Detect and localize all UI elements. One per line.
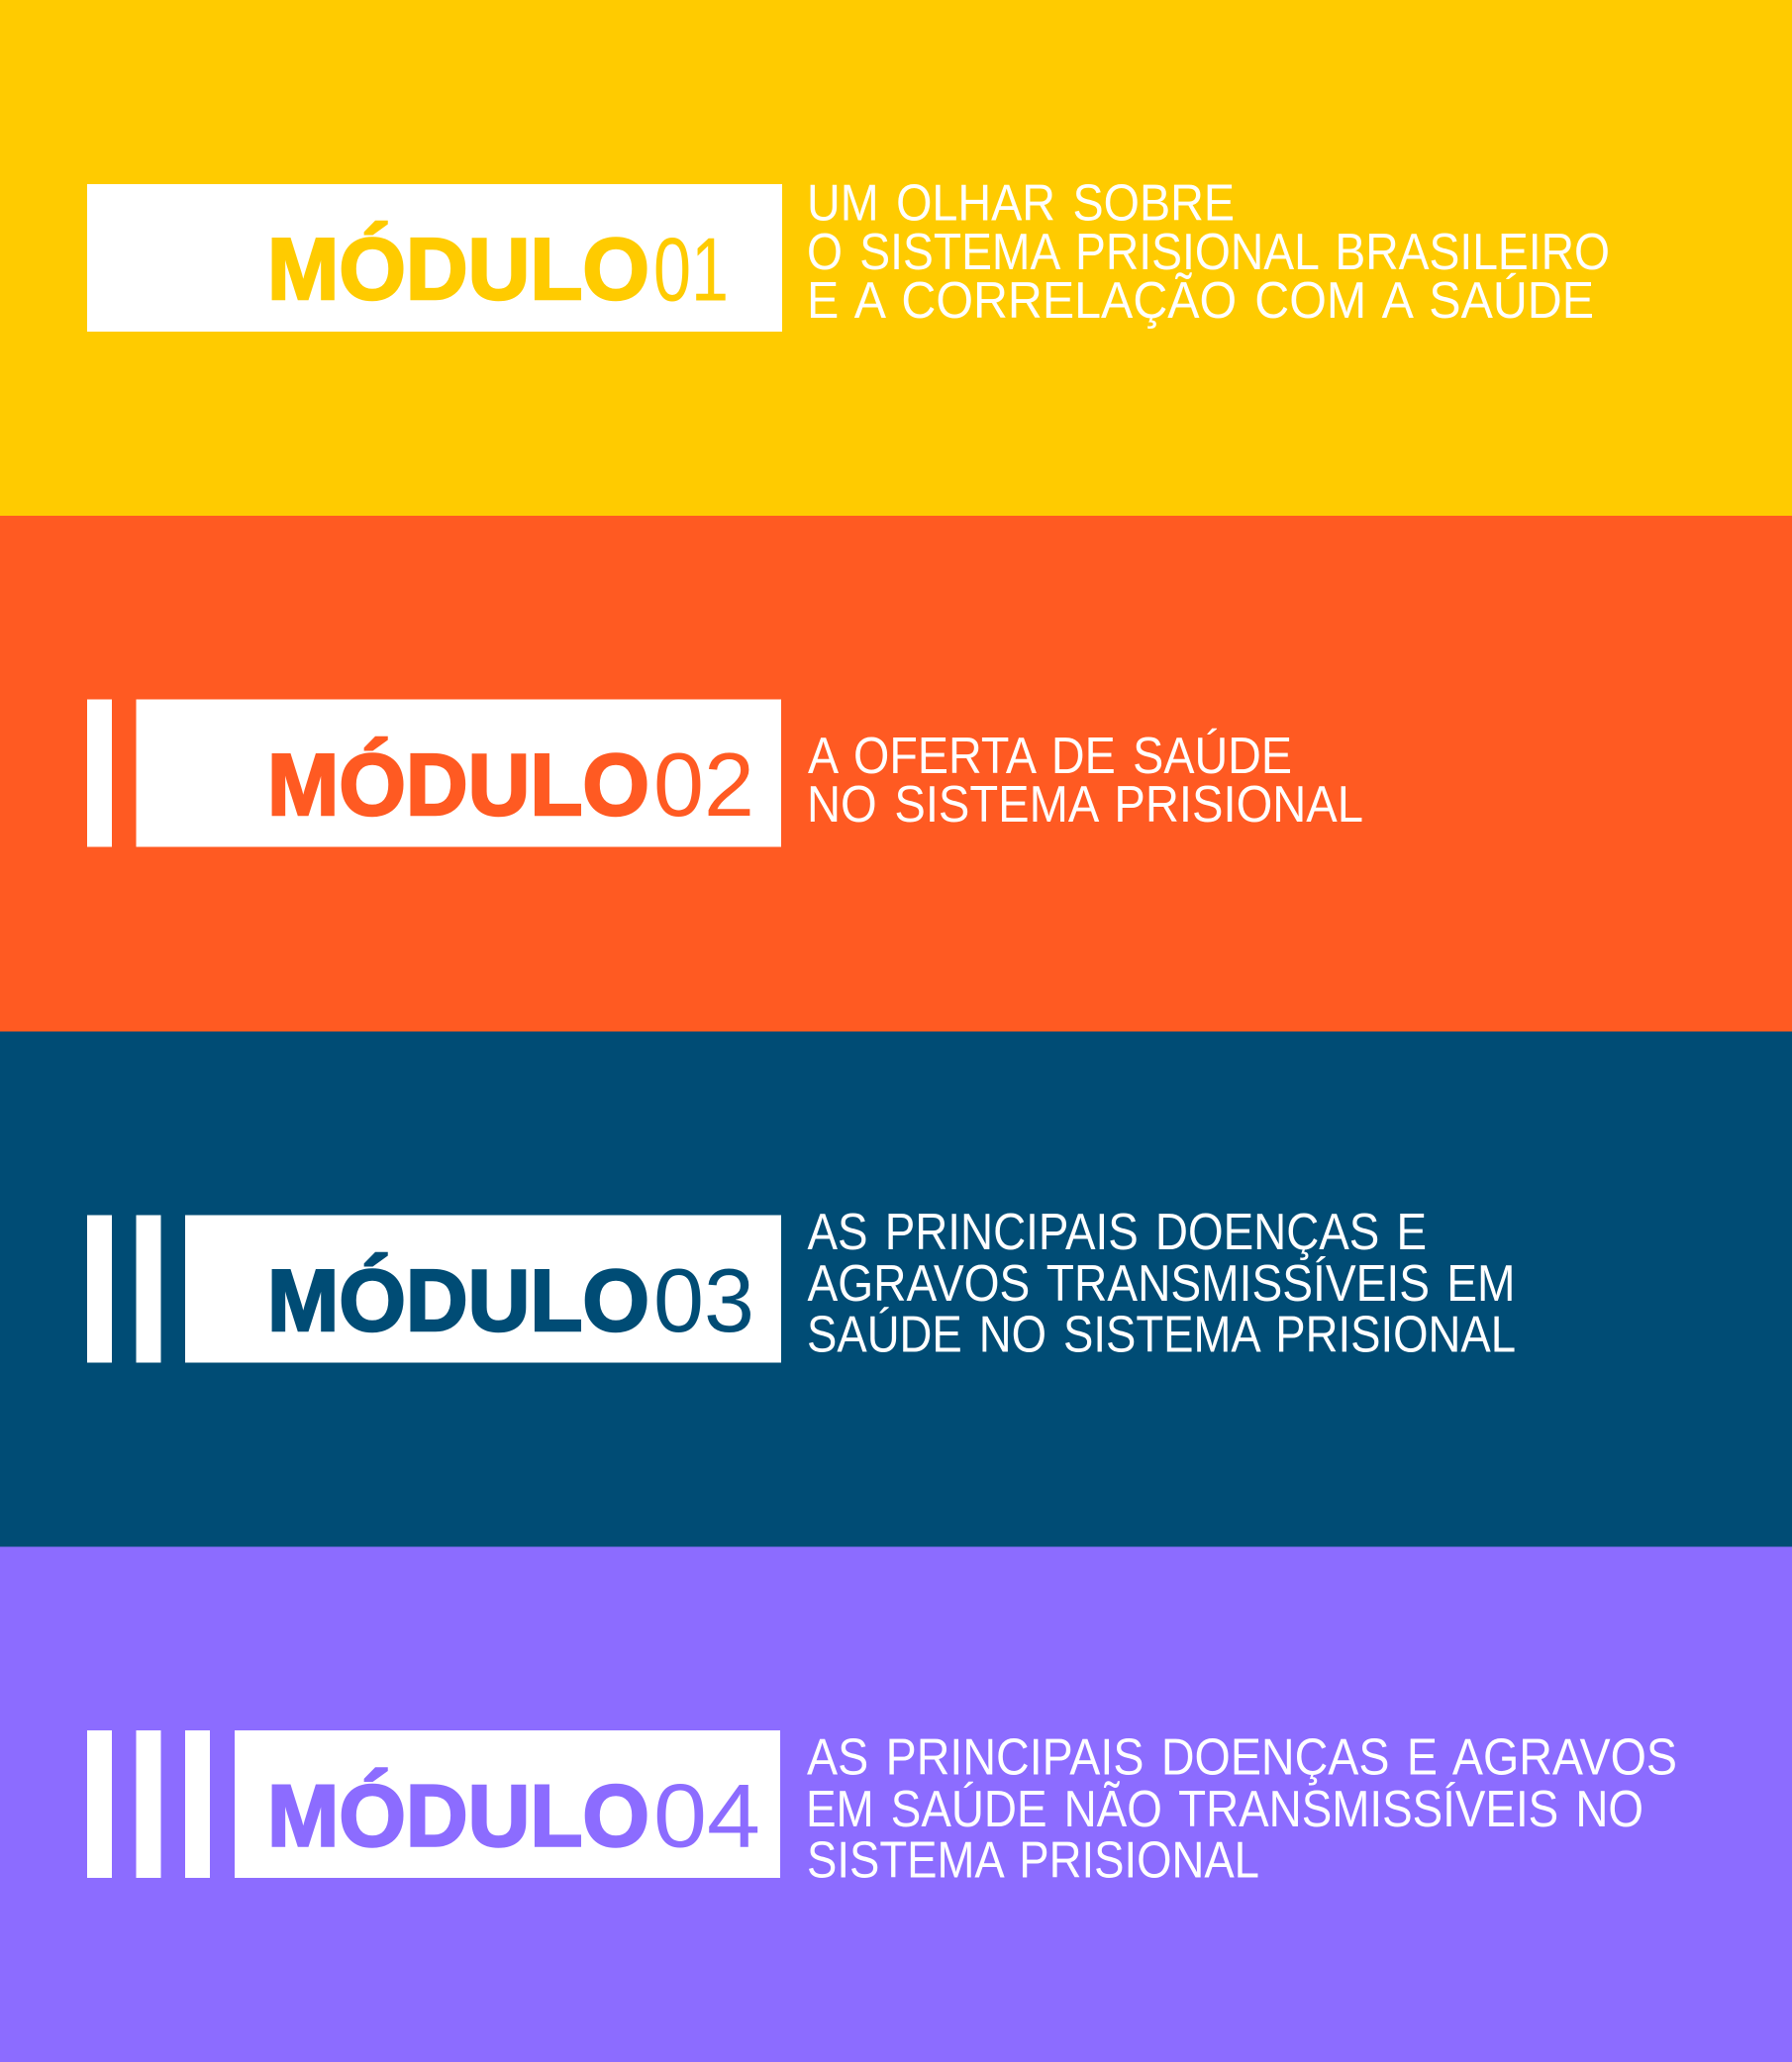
text block: módulo 04 description: SISTEMA PRISIONAL <box>807 1832 1259 1890</box>
panel: módulo 04 <box>0 1546 1792 2062</box>
heading: MÓDULO 04: MÓDULO <box>267 1767 649 1865</box>
text block: módulo 03 description: SAÚDE NO SISTEMA PRISIONAL <box>807 1307 1516 1364</box>
text block: módulo 03 description: AS PRINCIPAIS DOENÇAS E <box>808 1204 1427 1261</box>
heading: MÓDULO 02: 02 <box>653 736 754 835</box>
panel: módulo 02 <box>0 516 1792 1031</box>
heading: MÓDULO 02: MÓDULO <box>267 736 649 834</box>
tally bar <box>87 699 112 847</box>
text block: módulo 02 description: NO SISTEMA PRISIONAL <box>807 776 1363 834</box>
text block: módulo 04 description: AS PRINCIPAIS DOENÇAS E AGRAVOS <box>807 1729 1677 1787</box>
text block: módulo 01 description: E A CORRELAÇÃO COM A SAÚDE <box>807 272 1594 330</box>
panel: módulo 03 <box>0 1031 1792 1546</box>
text block: módulo 02 description <box>807 728 1363 834</box>
text block: módulo 01 description: O SISTEMA PRISIONAL BRASILEIRO <box>807 224 1610 281</box>
label box: módulo 01 <box>87 184 782 332</box>
heading: MÓDULO 03: 03 <box>653 1251 754 1351</box>
label box: módulo 04 <box>235 1730 780 1878</box>
heading: MÓDULO 04: 04 <box>653 1767 760 1867</box>
panel: módulo 01 <box>0 0 1792 516</box>
text block: módulo 03 description: AGRAVOS TRANSMISSÍVEIS EM <box>808 1255 1515 1313</box>
text block: módulo 01 description: UM OLHAR SOBRE <box>807 175 1235 233</box>
text block: módulo 04 description: EM SAÚDE NÃO TRANSMISSÍVEIS NO <box>806 1781 1643 1838</box>
heading: MÓDULO 01: 01 <box>653 220 729 320</box>
label box: módulo 02 <box>137 699 781 847</box>
heading: MÓDULO 03: MÓDULO <box>267 1251 649 1349</box>
text block: módulo 03 description <box>807 1204 1516 1364</box>
heading: MÓDULO 01: MÓDULO <box>267 220 649 318</box>
text block: módulo 02 description: A OFERTA DE SAÚDE <box>808 728 1292 785</box>
label box: módulo 03 <box>185 1216 781 1362</box>
text block: módulo 01 description <box>807 175 1610 330</box>
tally bars <box>87 1730 210 1878</box>
text block: módulo 04 description <box>806 1729 1677 1890</box>
tally bars <box>87 1216 160 1362</box>
